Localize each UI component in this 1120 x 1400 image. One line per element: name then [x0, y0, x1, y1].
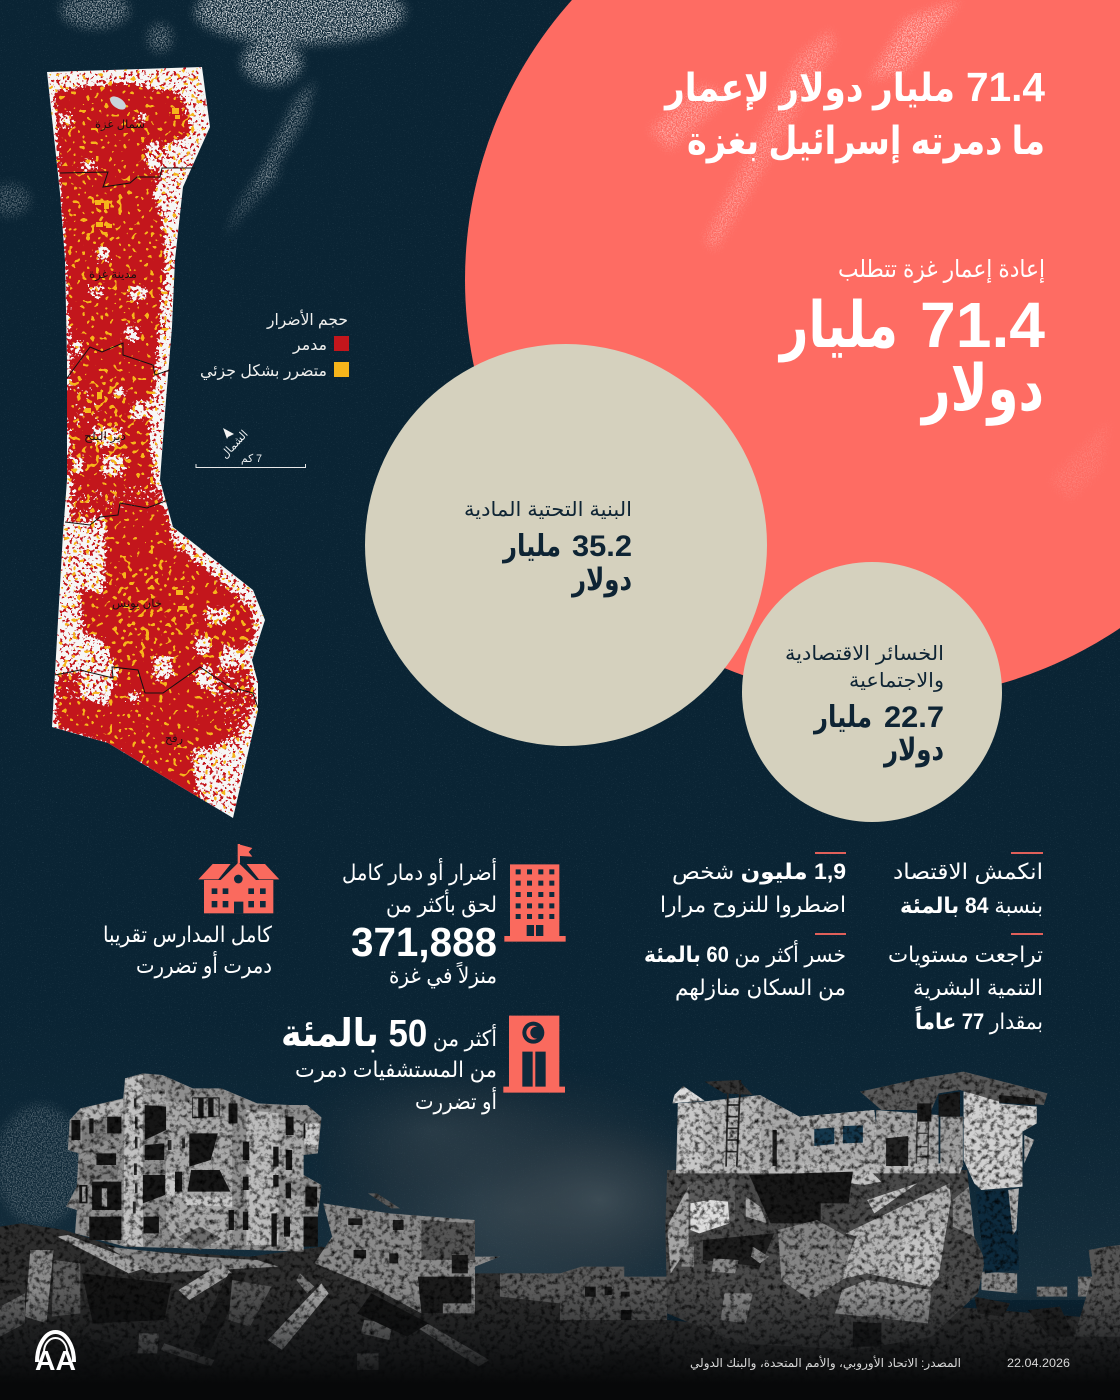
stat: lost homes: من السكان منازلهم [675, 975, 846, 1001]
map: district labels: دير البلح [84, 431, 126, 444]
stat: displaced people: 1,9 مليون شخص [672, 859, 846, 885]
stat: hospitals: أكثر من 50 بالمئة [281, 1013, 497, 1055]
scale bar [196, 453, 306, 468]
total cost text: مليار [778, 289, 898, 363]
ruins: left apartment building [66, 1073, 321, 1252]
damage map of Gaza [47, 67, 265, 818]
map: district labels: خان يونس [112, 598, 162, 611]
stat: displaced people: اضطروا للنزوح مرارا [660, 892, 846, 917]
circle: physical infrastructure [365, 344, 767, 746]
map legend [200, 309, 349, 381]
stat: schools: دمرت أو تضررت [136, 951, 272, 978]
infrastructure text: البنية التحتية المادية [464, 499, 632, 521]
economic losses text: 22.7 [884, 701, 944, 734]
map: district labels: شمال غزة [95, 119, 145, 132]
infrastructure text: دولار [570, 562, 632, 598]
stat: homes damaged [342, 858, 497, 989]
source note: المصدر: الاتحاد الأوروبي، والأمم المتحدة، والبنك الدولي [690, 1355, 961, 1371]
economic losses text: مليار [812, 701, 872, 734]
infrastructure text: 35.2 [572, 530, 632, 563]
stat: hospitals [281, 1013, 497, 1114]
map legend: مدمر [292, 337, 327, 355]
stat: homes damaged: منزلاً في غزة [389, 961, 497, 989]
ruins: rubble field and distant buildings [0, 1193, 1120, 1400]
total cost text [778, 256, 1045, 426]
stat: economy shrank: بنسبة 84 بالمئة [900, 893, 1043, 918]
title: مليار دولار لإعمار [663, 67, 955, 111]
economic losses text [785, 643, 944, 768]
icon: school [198, 844, 279, 913]
stat: hospitals: من المستشفيات دمرت [295, 1057, 497, 1082]
stat: schools [103, 922, 272, 978]
logo: Anadolu Agency: AA [35, 1345, 76, 1376]
bottom fade to black [0, 1290, 1120, 1400]
texture: clouds at the top [0, 0, 405, 1225]
economic losses text: دولار [882, 732, 944, 768]
stat: lost homes: خسر أكثر من 60 بالمئة [644, 940, 846, 967]
stat: displaced people [660, 852, 846, 917]
stat: economy shrank: انكمش الاقتصاد [893, 859, 1043, 885]
total cost text: إعادة إعمار غزة تتطلب [838, 256, 1045, 284]
stat: lost homes [644, 933, 846, 1001]
icon: hospital [503, 1016, 565, 1093]
map legend: متضرر بشكل جزئي [200, 363, 327, 381]
icon: apartment building [504, 864, 566, 942]
fog behind the buildings [290, 1060, 740, 1360]
stat: hospitals: أو تضررت [415, 1087, 497, 1114]
ruins illustration [0, 1072, 1120, 1400]
date: 22.04.2026 [1007, 1356, 1070, 1370]
title [663, 64, 1045, 164]
map: district borders [55, 168, 258, 708]
title: 71.4 [966, 64, 1045, 110]
legend: destroyed swatch [334, 336, 349, 351]
map: district labels: مدينة غزة [89, 269, 137, 282]
stat: human development: بمقدار 77 عاماً [915, 1005, 1043, 1034]
legend: partially damaged swatch [334, 362, 349, 377]
map: district labels: رفح [165, 733, 183, 746]
stat: homes damaged: 371,888 [351, 919, 497, 965]
infrastructure text [464, 499, 632, 598]
stat: economy shrank [893, 852, 1043, 918]
stat: homes damaged: أضرار أو دمار كامل [342, 858, 497, 885]
map: partially damaged areas [47, 67, 265, 818]
circle: total [465, 0, 1120, 700]
scale bar: 7 كم [241, 453, 262, 465]
stat: schools: كامل المدارس تقريبا [103, 922, 272, 948]
stat: homes damaged: لحق بأكثر من [386, 889, 497, 918]
title: ما دمرته إسرائيل بغزة [687, 120, 1045, 164]
economic losses text: والاجتماعية [849, 670, 944, 692]
map legend: حجم الأضرار [266, 309, 348, 330]
map: destroyed areas [47, 67, 265, 818]
circle: economic and social losses [742, 562, 1002, 822]
infrastructure text: مليار [501, 530, 561, 563]
economic losses text: الخسائر الاقتصادية [785, 643, 944, 665]
total cost text: دولار [920, 352, 1044, 426]
stat: human development [888, 933, 1043, 1034]
north arrow: الشمال [219, 428, 251, 461]
ruins: right collapsed house [665, 1072, 1047, 1350]
map: district labels [84, 119, 183, 746]
stat: human development: تراجعت مستويات [888, 942, 1043, 967]
logo: Anadolu Agency [35, 1332, 76, 1376]
stat: human development: التنمية البشرية [913, 975, 1043, 1000]
texture: scratches on total circle [650, 0, 1110, 500]
map: land outline [47, 67, 265, 818]
total cost text: 71.4 [920, 289, 1045, 361]
